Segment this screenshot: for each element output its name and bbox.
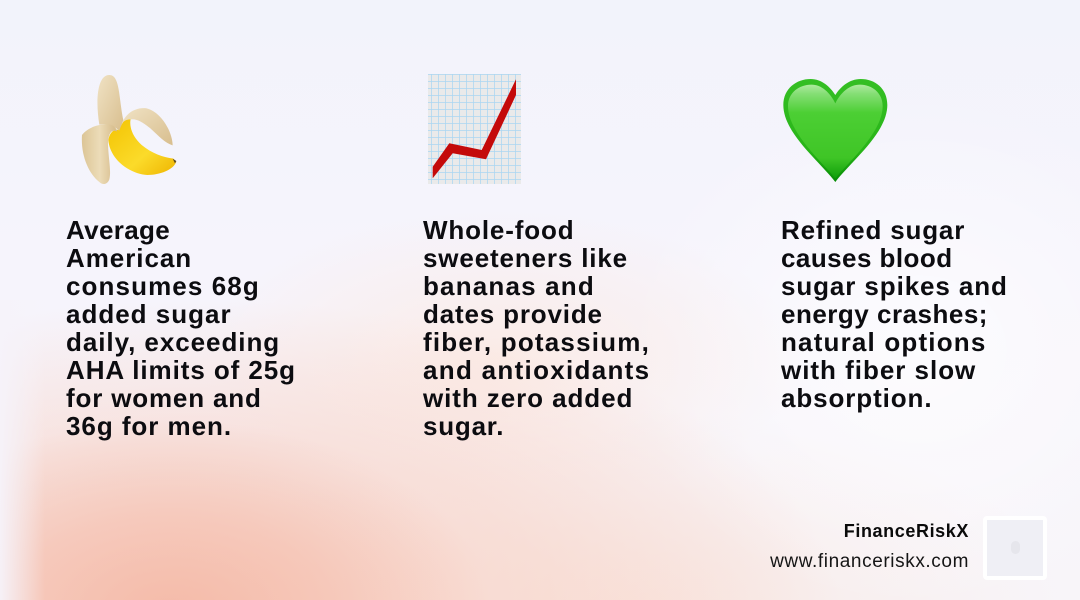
- text: sugar intake fact: added sugar: [66, 299, 232, 329]
- text: refined sugar fact: with fiber slow: [781, 355, 976, 385]
- text: refined sugar fact: sugar spikes and: [781, 271, 1008, 301]
- text: sugar intake fact: AHA limits of 25g: [66, 355, 296, 385]
- text: whole-food sweeteners fact: sweeteners like: [423, 243, 628, 273]
- text: whole-food sweeteners fact: with zero added: [423, 383, 633, 413]
- brand name: FinanceRiskX: [844, 521, 969, 541]
- text: refined sugar fact: [780, 215, 1008, 413]
- text: sugar intake fact: daily, exceeding: [66, 327, 280, 357]
- text: sugar intake fact: Average: [66, 215, 170, 245]
- text: whole-food sweeteners fact: dates provide: [423, 299, 603, 329]
- text: whole-food sweeteners fact: Whole-food: [423, 215, 574, 245]
- logo placeholder: [983, 516, 1047, 580]
- text: sugar intake fact: American: [66, 243, 192, 273]
- text: refined sugar fact: causes blood: [781, 243, 953, 273]
- text: whole-food sweeteners fact: and antioxidants: [423, 355, 650, 385]
- website url: www.financeriskx.com: [770, 551, 969, 572]
- text: sugar intake fact: 36g for men.: [66, 411, 232, 441]
- text: whole-food sweeteners fact: fiber, potassium,: [423, 327, 650, 357]
- icon: green heart: [783, 79, 887, 182]
- text: sugar intake fact: [66, 215, 296, 441]
- icon: chart increasing: [428, 74, 521, 184]
- text: refined sugar fact: Refined sugar: [781, 215, 965, 245]
- text: refined sugar fact: natural options: [781, 327, 986, 357]
- icon: banana: [82, 75, 176, 184]
- text: sugar intake fact: consumes 68g: [66, 271, 260, 301]
- text: whole-food sweeteners fact: [422, 215, 650, 441]
- text: refined sugar fact: absorption.: [781, 383, 932, 413]
- text: whole-food sweeteners fact: sugar.: [423, 411, 504, 441]
- text: sugar intake fact: for women and: [66, 383, 262, 413]
- text: whole-food sweeteners fact: bananas and: [423, 271, 595, 301]
- text: refined sugar fact: energy crashes;: [781, 299, 988, 329]
